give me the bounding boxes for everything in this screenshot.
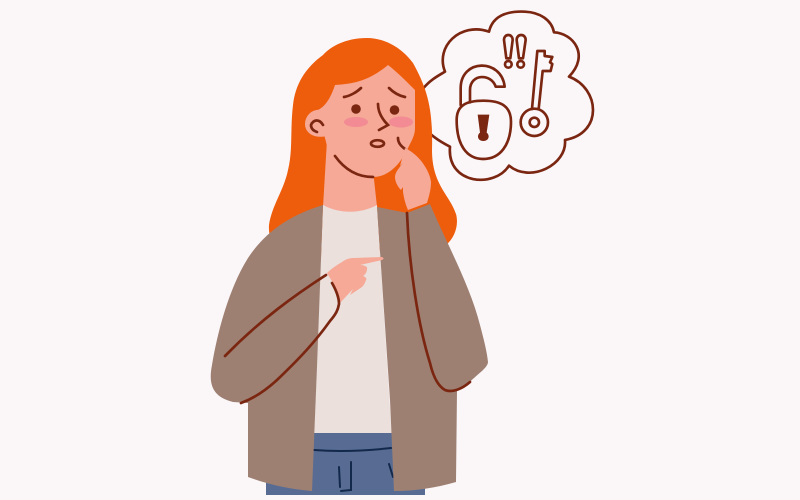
jacket right panel and sleeve (377, 204, 488, 491)
cloud outline (423, 12, 593, 180)
chin hand (395, 148, 431, 210)
face (305, 65, 415, 177)
blush (344, 117, 368, 127)
jacket left panel and sleeve (211, 205, 323, 491)
icon: exclamation marks (504, 35, 526, 68)
right sleeve line (407, 213, 470, 391)
sleeve outlines (225, 213, 470, 403)
hair (269, 38, 457, 262)
icon: key (521, 51, 552, 136)
jeans (266, 433, 425, 495)
face shape (318, 65, 415, 177)
thought bubble (423, 12, 593, 180)
pointing hand (327, 257, 384, 303)
left sleeve line (225, 275, 326, 356)
ear (305, 110, 327, 137)
left cuff and lower sleeve line (241, 283, 339, 403)
eyes (351, 104, 361, 114)
facial lines (311, 88, 405, 177)
icon: open padlock (457, 66, 511, 159)
neck (323, 140, 377, 213)
jacket (211, 204, 488, 491)
shirt (314, 205, 392, 440)
